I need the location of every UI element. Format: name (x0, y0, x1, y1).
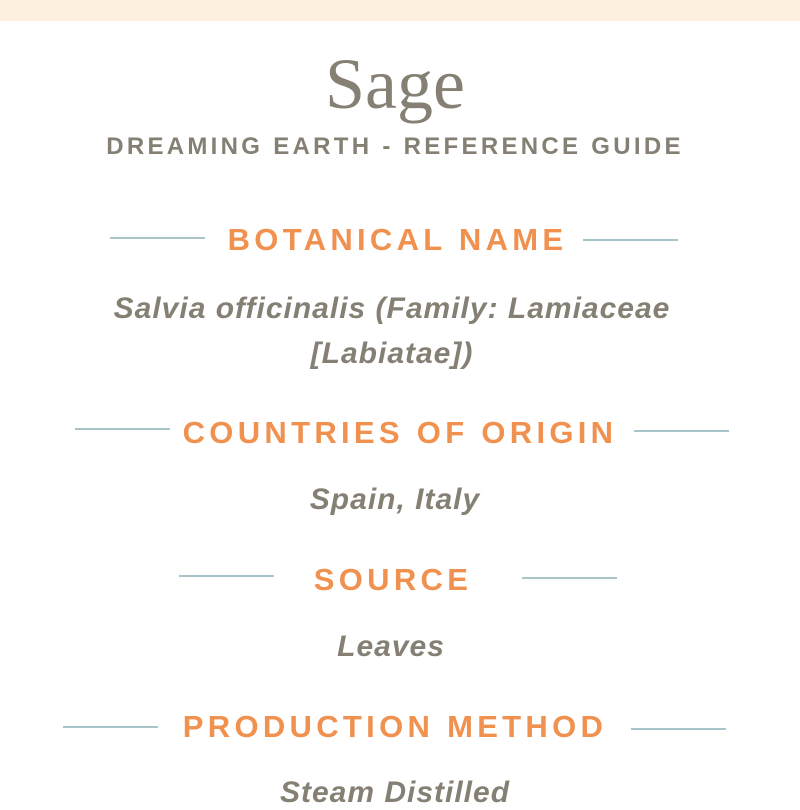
heading: botanical name: BOTANICAL NAME (228, 222, 567, 257)
section: countries of origin (75, 415, 729, 516)
text: countries: Spain, Italy (310, 483, 480, 516)
heading: source: SOURCE (314, 562, 472, 597)
section: source (179, 562, 617, 663)
heading: production: PRODUCTION METHOD (183, 709, 607, 744)
section: botanical name (110, 222, 678, 370)
text: botanical name: Salvia officinalis (Family: Lamiaceae (114, 292, 670, 325)
text: production: Steam Distilled (280, 776, 510, 809)
text: botanical name (114, 292, 670, 370)
section: production method (63, 709, 726, 809)
title: Sage (325, 44, 465, 124)
heading: countries: COUNTRIES OF ORIGIN (183, 415, 617, 450)
text: botanical name: [Labiatae]) (311, 337, 473, 370)
subtitle: DREAMING EARTH - REFERENCE GUIDE (106, 133, 684, 160)
text: source: Leaves (337, 630, 445, 663)
top band (0, 0, 800, 21)
